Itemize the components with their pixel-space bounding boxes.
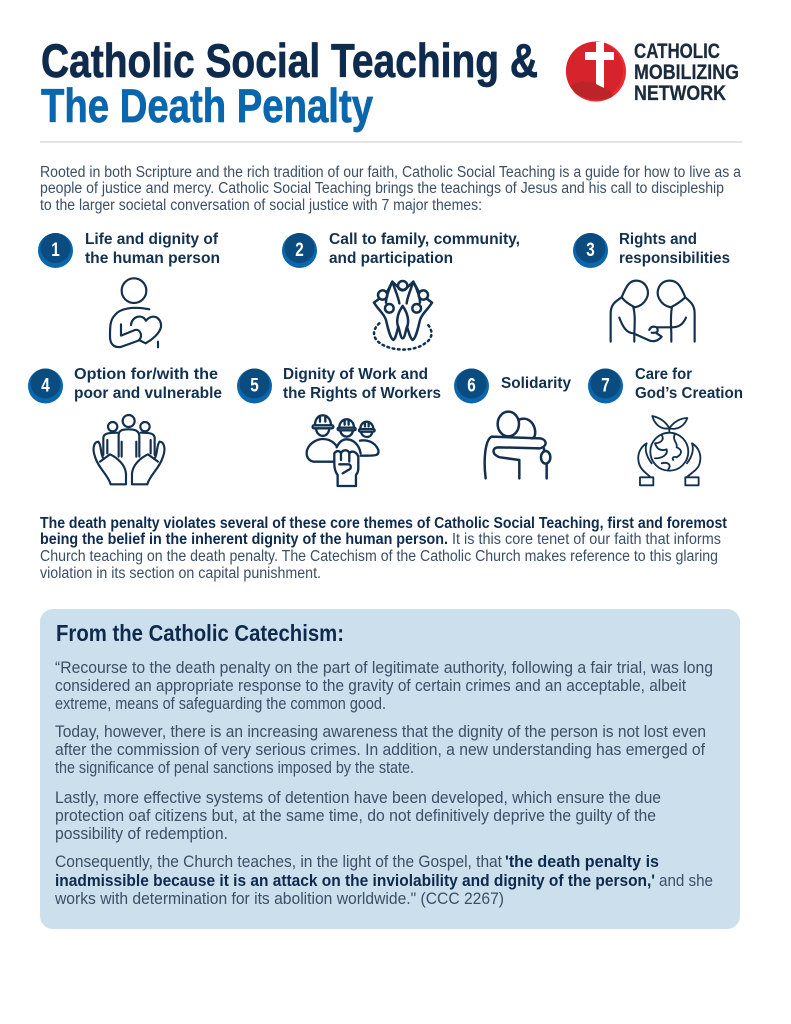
number badge 6: 6 — [467, 374, 476, 396]
number badge 7: 7 — [601, 374, 610, 396]
heading 4 — [74, 366, 222, 402]
number badge 3: 3 — [586, 239, 595, 261]
number badge 4: 4 — [41, 374, 50, 396]
quote paragraph 3: protection oaf citizens but, at the same time, do not definitively deprive the guilty of the — [55, 807, 656, 825]
quote paragraph 3 — [55, 789, 661, 843]
title: The Death Penalty — [41, 79, 373, 132]
heading 3 — [619, 231, 730, 267]
heading 1 — [85, 231, 220, 267]
quote paragraph 2: after the commission of very serious crimes. In addition, a new understanding has emerged of — [55, 741, 705, 759]
theme 4: option for the poor — [28, 366, 222, 484]
theme 2: family, community, participation — [282, 231, 520, 350]
icon: family circle — [374, 281, 432, 350]
heading 2: and participation — [329, 250, 453, 267]
title — [41, 34, 538, 132]
theme 1: life and dignity — [38, 231, 220, 347]
number badge 1: 1 — [51, 239, 60, 261]
quote paragraph 2 — [55, 723, 706, 777]
heading 3: responsibilities — [619, 250, 730, 267]
heading 2 — [329, 231, 520, 267]
quote paragraph 3: possibility of redemption. — [55, 825, 228, 843]
intro paragraph: people of justice and mercy. Catholic Social Teaching brings the teachings of Jesus and his call to discipleship — [40, 180, 724, 197]
intro paragraph — [40, 164, 741, 214]
icon: two people embracing — [485, 412, 550, 478]
heading 3: Rights and — [619, 231, 697, 248]
body paragraph: death penalty violates themes: being the belief in the inherent dignity of the human person. — [40, 531, 448, 548]
panel: from the Catholic Catechism — [40, 609, 740, 929]
number badge 5 — [237, 368, 272, 404]
quote paragraph 2: Today, however, there is an increasing awareness that the dignity of the person is not lost even — [55, 723, 706, 741]
theme 3: rights and responsibilities — [573, 231, 730, 342]
heading 6: Solidarity — [501, 375, 571, 392]
panel heading: From the Catholic Catechism: — [56, 620, 344, 646]
heading 7 — [635, 366, 743, 402]
heading 5 — [283, 366, 441, 402]
logo: Catholic Mobilizing Network — [566, 40, 739, 105]
quote paragraph 4 — [54, 853, 713, 908]
number badge 5: 5 — [250, 374, 259, 396]
quote paragraph 4: 'the death penalty is — [505, 853, 659, 871]
icon: two people shaking hands — [611, 281, 695, 342]
number badge 2: 2 — [295, 239, 304, 261]
heading 4: Option for/with the — [74, 366, 218, 383]
quote paragraph 1: extreme, means of safeguarding the common good. — [55, 695, 386, 713]
body paragraph: death penalty violates themes: violation in its section on capital punishment. — [40, 565, 321, 582]
number badge 7 — [588, 368, 623, 404]
number badge 1 — [38, 233, 73, 268]
title: Catholic Social Teaching & — [41, 34, 538, 87]
quote paragraph 1 — [55, 659, 713, 713]
quote paragraph 2: the significance of penal sanctions imposed by the state. — [55, 759, 414, 777]
theme 6: solidarity — [454, 368, 571, 478]
quote paragraph 4: works with determination for its abolition worldwide." (CCC 2267) — [54, 890, 504, 908]
body paragraph: death penalty violates themes — [40, 515, 727, 582]
logo: Catholic Mobilizing Network: NETWORK — [634, 82, 726, 105]
heading 5: Dignity of Work and — [283, 366, 428, 383]
icon: hands holding people — [94, 415, 164, 484]
intro paragraph: to the larger societal conversation of social justice with 7 major themes: — [40, 197, 482, 214]
body paragraph: death penalty violates themes: It is this core tenet of our faith that informs — [452, 531, 721, 548]
quote paragraph 4: and she — [659, 872, 713, 890]
heading 1: Life and dignity of — [85, 231, 219, 248]
theme 7: care for creation — [588, 366, 743, 485]
quote paragraph 1: considered an appropriate response to the gravity of certain crimes and an acceptable, albeit — [55, 677, 686, 695]
body paragraph: death penalty violates themes: The death penalty violates several of these core themes of Catholic Social Teaching, first and foremost — [40, 515, 727, 532]
icon: hands around globe and seedling — [638, 416, 700, 485]
icon: workers and raised fist — [307, 415, 379, 486]
logo: Catholic Mobilizing Network: CATHOLIC — [634, 40, 720, 63]
quote paragraph 4: inadmissible because it is an attack on the inviolability and dignity of the person,' — [55, 872, 655, 890]
heading 7: God’s Creation — [635, 385, 743, 402]
quote paragraph 1: “Recourse to the death penalty on the part of legitimate authority, following a fair trial, was long — [55, 659, 713, 677]
number badge 4 — [28, 368, 63, 404]
body paragraph: death penalty violates themes: Church teaching on the death penalty. The Catechism of the Catholic Church makes reference to this glaring — [40, 548, 718, 565]
theme 5: dignity of work — [237, 366, 441, 486]
heading 7: Care for — [635, 366, 692, 383]
quote paragraph 3: Lastly, more effective systems of detention have been developed, which ensure the due — [55, 789, 661, 807]
number badge 2 — [282, 233, 317, 268]
heading 2: Call to family, community, — [329, 231, 520, 248]
number badge 3 — [573, 233, 608, 268]
heading 5: the Rights of Workers — [283, 385, 441, 402]
quote paragraph 4: Consequently, the Church teaches, in the light of the Gospel, that — [55, 853, 502, 871]
intro paragraph: Rooted in both Scripture and the rich tradition of our faith, Catholic Social Teaching is a guide for how to live as a — [40, 164, 741, 181]
logo: Catholic Mobilizing Network: MOBILIZING — [634, 61, 739, 84]
icon: person holding heart — [110, 278, 161, 347]
heading 1: the human person — [85, 250, 220, 267]
heading 4: poor and vulnerable — [74, 385, 222, 402]
